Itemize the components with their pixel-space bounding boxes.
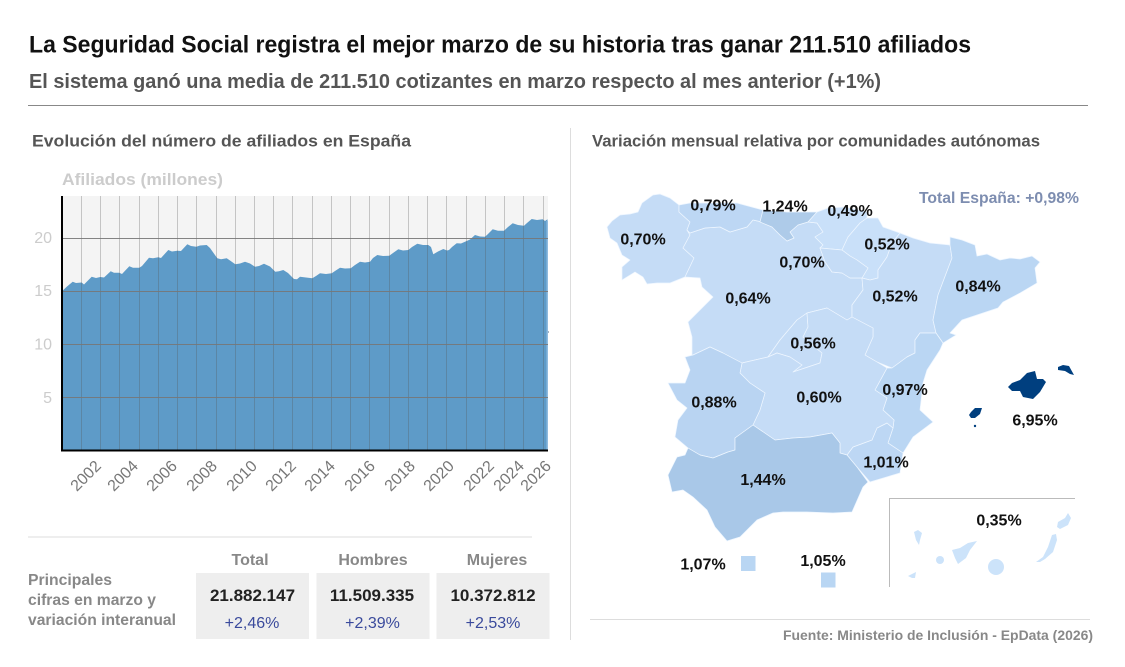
column: hombres: Hombres	[338, 552, 408, 569]
map value labels: 0,88%	[691, 394, 737, 412]
subtitle: El sistema ganó una media de 211.510 cotizantes en marzo respecto al mes anterior (+1%)	[29, 71, 881, 93]
area chart: afiliados	[34, 170, 555, 495]
region: La Rioja	[820, 248, 868, 278]
map value labels: 1,05%	[800, 553, 846, 570]
region: Cantabria	[760, 210, 817, 241]
map value labels	[620, 198, 1058, 574]
table label: cifras en marzo y	[28, 592, 156, 609]
map value labels: 0,60%	[796, 390, 842, 406]
source: Fuente: Ministerio de Inclusión - EpData (2026)	[783, 627, 1093, 643]
title: La Seguridad Social registra el mejor marzo de su historia tras ganar 211.510 afiliados	[29, 32, 971, 58]
x axis labels: 2004	[105, 458, 142, 495]
x axis labels: 2006	[144, 458, 181, 495]
map value labels: 0,84%	[955, 278, 1001, 296]
region: Murcia	[847, 423, 903, 482]
map value labels: 0,35%	[976, 512, 1022, 530]
map value labels: 0,52%	[872, 288, 918, 306]
region: Baleares	[969, 365, 1074, 427]
x axis labels	[68, 458, 555, 495]
region: Madrid	[768, 313, 822, 372]
region: Navarra	[842, 218, 900, 280]
region: Asturias	[679, 203, 763, 233]
column: mujeres: 10.372.812	[450, 586, 536, 605]
region: Castilla y León	[683, 220, 863, 363]
chart axis title: Afiliados (millones)	[62, 170, 223, 189]
y axis labels: 20	[34, 230, 52, 247]
region: Cataluña	[933, 237, 1040, 343]
x axis labels: 2010	[224, 458, 261, 495]
vertical grid	[82, 196, 544, 450]
column: hombres: +2,39%	[345, 615, 400, 632]
column: mujeres: Mujeres	[467, 552, 527, 569]
y axis labels	[34, 230, 52, 407]
map value labels: 1,24%	[762, 198, 808, 216]
region: Castilla-La Mancha	[740, 308, 894, 455]
x axis labels: 2012	[263, 458, 300, 495]
region: Galicia	[607, 194, 694, 284]
map value labels: 1,01%	[863, 454, 909, 472]
region: País Vasco	[808, 207, 867, 250]
map value labels: 0,97%	[882, 382, 928, 399]
x axis labels: 2014	[302, 458, 339, 495]
region: Extremadura	[668, 347, 765, 458]
map value labels: 0,79%	[690, 198, 736, 214]
map value labels: 1,07%	[680, 556, 726, 574]
total España: Total España: +0,98%	[919, 190, 1079, 207]
map value labels: 0,49%	[827, 203, 873, 220]
heading: evolución: Evolución del número de afiliados en España	[32, 132, 412, 150]
column: hombres: 11.509.335	[330, 586, 414, 605]
map value labels: 0,70%	[779, 254, 825, 272]
axes	[61, 196, 548, 452]
table label: variación interanual	[28, 612, 176, 629]
y axis labels: 5	[43, 390, 52, 407]
column: total: 21.882.147	[210, 586, 295, 605]
map value labels: 0,56%	[790, 336, 836, 352]
region: Andalucía	[668, 425, 868, 541]
y axis labels: 15	[34, 283, 52, 300]
column: mujeres: +2,53%	[466, 615, 520, 632]
region: Comunidad Valenciana	[875, 333, 943, 453]
y axis labels: 10	[34, 336, 52, 354]
map value labels: 6,95%	[1012, 412, 1058, 430]
map of Spain	[607, 190, 1079, 588]
horizontal grid	[62, 238, 548, 398]
column: total	[196, 552, 309, 639]
map value labels: 1,44%	[740, 472, 786, 489]
x axis labels: 2008	[184, 458, 221, 495]
map value labels: 0,64%	[725, 290, 771, 308]
column: hombres	[316, 552, 430, 639]
x axis labels: 2026	[518, 458, 555, 495]
x axis labels: 2024	[491, 458, 528, 495]
map value labels: 0,70%	[620, 232, 666, 248]
inset frame: Canarias	[890, 498, 1075, 587]
column: total: Total	[231, 552, 269, 569]
heading: variación: Variación mensual relativa por comunidades autónomas	[592, 132, 1040, 150]
x axis labels: 2022	[461, 458, 498, 495]
region: Melilla	[821, 572, 836, 588]
x axis labels: 2020	[421, 458, 458, 495]
map value labels: 0,52%	[864, 236, 910, 254]
x axis labels: 2018	[382, 458, 419, 495]
region: Aragón	[852, 233, 952, 368]
area series	[62, 219, 548, 450]
x axis labels: 2002	[68, 458, 105, 495]
region: Canarias	[908, 513, 1071, 578]
table label: Principales	[28, 572, 112, 589]
region: Ceuta	[741, 556, 756, 571]
column: mujeres	[436, 552, 550, 639]
panel: principales cifras	[28, 552, 550, 639]
table label	[28, 572, 176, 629]
x axis labels: 2016	[342, 458, 379, 495]
column: total: +2,46%	[225, 615, 279, 632]
